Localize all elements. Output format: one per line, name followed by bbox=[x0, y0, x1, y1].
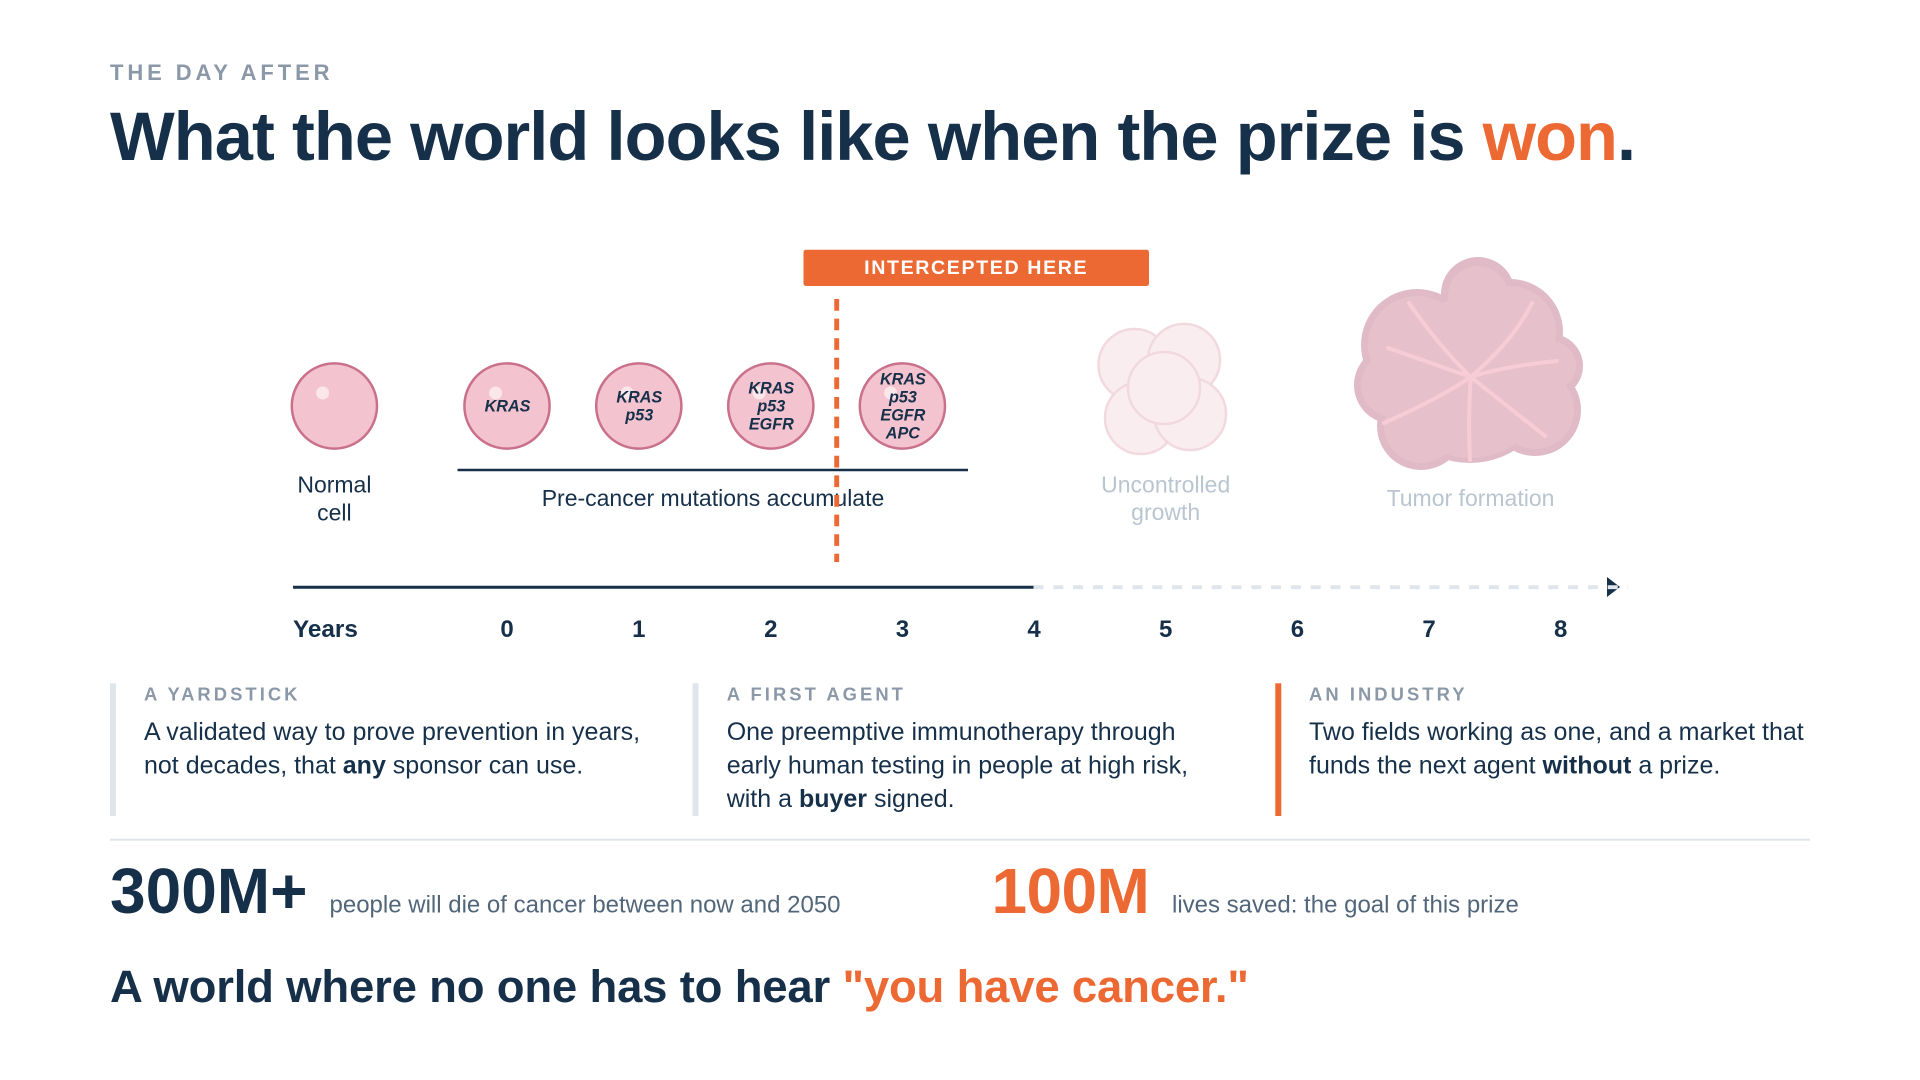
body: an industry: funds the next agent without a prize. bbox=[1309, 752, 1720, 780]
eyebrow heading: THE DAY AFTER bbox=[110, 60, 333, 85]
label: normal cell: cell bbox=[317, 499, 352, 525]
kicker: a yardstick: A YARDSTICK bbox=[144, 684, 301, 705]
axis labels: years: 1 bbox=[632, 616, 645, 643]
icon: cell KRAS p53: KRAS bbox=[616, 389, 662, 407]
stat: 300M+: 300M+ bbox=[110, 855, 307, 927]
icon: cell KRAS p53 bbox=[596, 363, 681, 449]
stat: 100M bbox=[992, 855, 1519, 927]
icon: cell KRAS p53 EGFR bbox=[728, 363, 813, 449]
icon: cell KRAS p53 EGFR: EGFR bbox=[749, 415, 794, 433]
stat: 100M: 100M bbox=[992, 855, 1149, 927]
axis labels: years: Years bbox=[293, 616, 358, 643]
kicker: a first agent: A FIRST AGENT bbox=[727, 684, 906, 705]
stat: 100M: lives saved: the goal of this prize bbox=[1172, 892, 1519, 918]
icon: cell KRAS p53 EGFR APC: KRAS bbox=[880, 370, 926, 388]
axis labels: years: 5 bbox=[1159, 616, 1172, 643]
label: pre-cancer mutations: Pre-cancer mutations accumulate bbox=[542, 485, 884, 511]
label: normal cell: Normal bbox=[297, 472, 371, 498]
label: uncontrolled growth: Uncontrolled bbox=[1101, 472, 1230, 498]
closing statement: A world where no one has to hear "you have cancer." bbox=[110, 961, 1249, 1012]
icon: cell KRAS p53 EGFR APC: APC bbox=[885, 424, 920, 442]
axis labels: years: 7 bbox=[1422, 616, 1436, 643]
kicker: an industry: AN INDUSTRY bbox=[1309, 684, 1468, 705]
icon: cell KRAS p53 EGFR APC bbox=[860, 363, 945, 449]
body: a first agent: with a buyer signed. bbox=[727, 785, 955, 813]
icon: cell KRAS p53 EGFR: KRAS bbox=[748, 379, 794, 397]
title: What the world looks like when the prize is won. bbox=[110, 98, 1635, 175]
banner: intercepted here: INTERCEPTED HERE bbox=[864, 257, 1088, 279]
banner: intercepted here bbox=[804, 250, 1149, 286]
icon: uncontrolled growth cluster bbox=[1098, 324, 1226, 454]
icon: normal cell bbox=[292, 363, 377, 449]
axis labels: years: 2 bbox=[764, 616, 777, 643]
body: a first agent: early human testing in people at high risk, bbox=[727, 752, 1188, 780]
intercept dashed line bbox=[834, 299, 839, 562]
icon: cell KRAS p53 EGFR: p53 bbox=[756, 397, 785, 415]
axis labels: years: 0 bbox=[500, 616, 514, 643]
panel: an industry bbox=[1275, 683, 1804, 816]
body: a yardstick: not decades, that any sponsor can use. bbox=[144, 752, 583, 780]
label: uncontrolled growth: growth bbox=[1131, 499, 1200, 525]
icon: cell KRAS p53: p53 bbox=[624, 407, 653, 425]
axis labels: years: 4 bbox=[1027, 616, 1041, 643]
icon: tumor bbox=[1354, 257, 1583, 470]
axis labels: years: 3 bbox=[896, 616, 909, 643]
body: an industry: Two fields working as one, and a market that bbox=[1309, 718, 1804, 746]
axis labels: years bbox=[293, 616, 1567, 643]
timeline axis arrow bbox=[293, 577, 1628, 597]
timeline diagram bbox=[292, 250, 1628, 643]
stat: 300M+: people will die of cancer between now and 2050 bbox=[330, 892, 841, 918]
icon: cell KRAS: KRAS bbox=[485, 398, 531, 416]
stat: 300M+ bbox=[110, 855, 841, 927]
axis labels: years: 6 bbox=[1291, 616, 1304, 643]
label: tumor formation: Tumor formation bbox=[1387, 485, 1554, 511]
body: a first agent: One preemptive immunotherapy through bbox=[727, 718, 1176, 746]
body: a yardstick: A validated way to prove prevention in years, bbox=[144, 718, 640, 746]
divider bbox=[110, 839, 1810, 841]
axis labels: years: 8 bbox=[1554, 616, 1567, 643]
panel: a first agent bbox=[692, 683, 1188, 816]
icon: cell KRAS p53 EGFR APC: p53 bbox=[888, 388, 917, 406]
icon: cell KRAS bbox=[464, 363, 550, 449]
bracket line: pre-cancer bbox=[458, 469, 968, 471]
panel: a yardstick bbox=[110, 683, 640, 816]
icon: cell KRAS p53 EGFR APC: EGFR bbox=[880, 406, 926, 424]
